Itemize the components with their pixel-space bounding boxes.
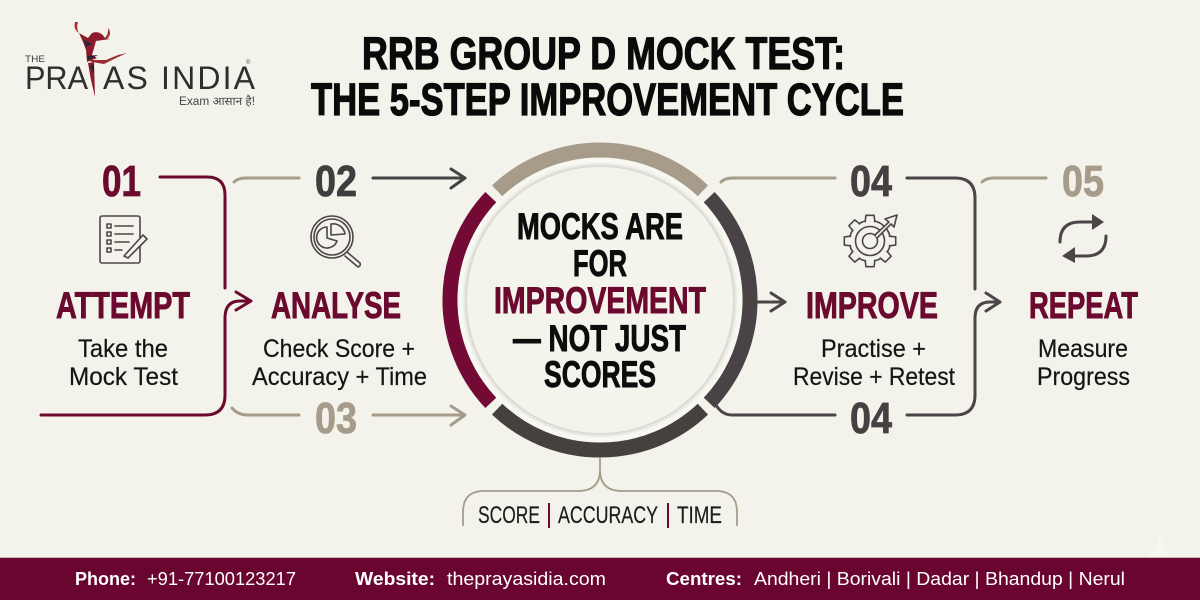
centres: Andheri | Borivali | Dadar | Bhandup | Nerul [754,569,1125,589]
step number 04 top: 04 [850,157,892,206]
description: attempt [69,335,178,391]
central circle [450,150,750,450]
heading: analyse: ANALYSE [271,285,401,326]
description: repeat: Progress [1037,363,1130,391]
heading: attempt: ATTEMPT [56,285,190,326]
faint corner mark [1147,533,1171,557]
description: analyse: Accuracy + Time [252,363,427,391]
footer bar [0,557,1200,600]
metrics labels: ACCURACY [558,502,658,529]
connector: top beige line [721,178,835,182]
description: improve: Revise + Retest [793,363,955,391]
description: analyse: Check Score + [263,335,415,363]
website [355,569,606,589]
step number 04 bottom: 04 [850,394,892,443]
heading: repeat: REPEAT [1029,285,1138,326]
ring segment: top [497,150,703,191]
title: RRB GROUP D MOCK TEST: [362,28,845,79]
title [311,28,904,125]
logo: The Prayas India: THE [25,54,45,65]
description: analyse [252,335,427,391]
icon: magnifier with pie chart [311,216,360,267]
step number 05: 05 [1062,157,1104,206]
connector: attempt to analyse [41,177,251,415]
logo: The Prayas India: ® [246,59,251,66]
description: attempt: Take the [78,335,168,363]
connector: lower beige line [232,408,299,415]
logo: The Prayas India: Exam आसान है! [179,94,255,108]
step 02 and 03: analyse [232,157,465,443]
metrics labels: SCORE [478,502,540,529]
step 05: repeat [982,157,1138,391]
metrics labels [478,502,722,529]
phone: +91-77100123217 [147,569,296,589]
connector: top beige line [234,178,299,182]
logo: The Prayas India: AS INDIA [103,60,256,96]
title: THE 5-STEP IMPROVEMENT CYCLE [311,74,904,125]
center message: — NOT JUST [513,318,686,359]
phone [75,569,296,589]
description: improve: Practise + [821,335,926,363]
description: repeat [1037,335,1130,391]
description: repeat: Measure [1038,335,1128,363]
step number 03: 03 [315,394,357,443]
center message: FOR [573,243,627,284]
logo: The Prayas India: PRA [25,60,89,96]
center message: IMPROVEMENT [494,280,706,321]
center message: MOCKS ARE [517,206,683,247]
description: improve [793,335,955,391]
heading: improve: IMPROVE [806,285,938,326]
icon: gear with target arrow [844,215,897,267]
connector: beige line [982,178,1046,182]
bracket: score accuracy time [463,458,737,529]
arrow: 03 to circle [373,406,465,425]
website: theprayasidia.com [447,569,606,589]
center message [494,206,706,395]
step number 01: 01 [102,157,141,206]
arrow: circle to improve [758,293,785,311]
logo: The Prayas India [25,22,256,108]
icon: checklist with pencil [100,216,147,263]
ring segment: bottom [497,409,703,450]
center message: SCORES [544,354,656,395]
connector: improve to repeat [907,178,1000,415]
ring segment: left [450,197,491,403]
description: attempt: Mock Test [69,363,178,391]
ring segment: right [709,197,750,403]
arrow: 02 to circle [373,169,465,188]
connector: lower dark line [716,405,835,415]
centres: Centres: [666,569,742,589]
step 01: attempt [56,157,190,391]
step number 02: 02 [315,157,357,206]
step 04: improve [716,157,955,443]
metrics labels: TIME [677,502,722,529]
inner disc [457,157,743,443]
phone: Phone: [75,569,136,589]
icon: repeat arrows [1060,214,1106,263]
website: Website: [355,569,435,589]
